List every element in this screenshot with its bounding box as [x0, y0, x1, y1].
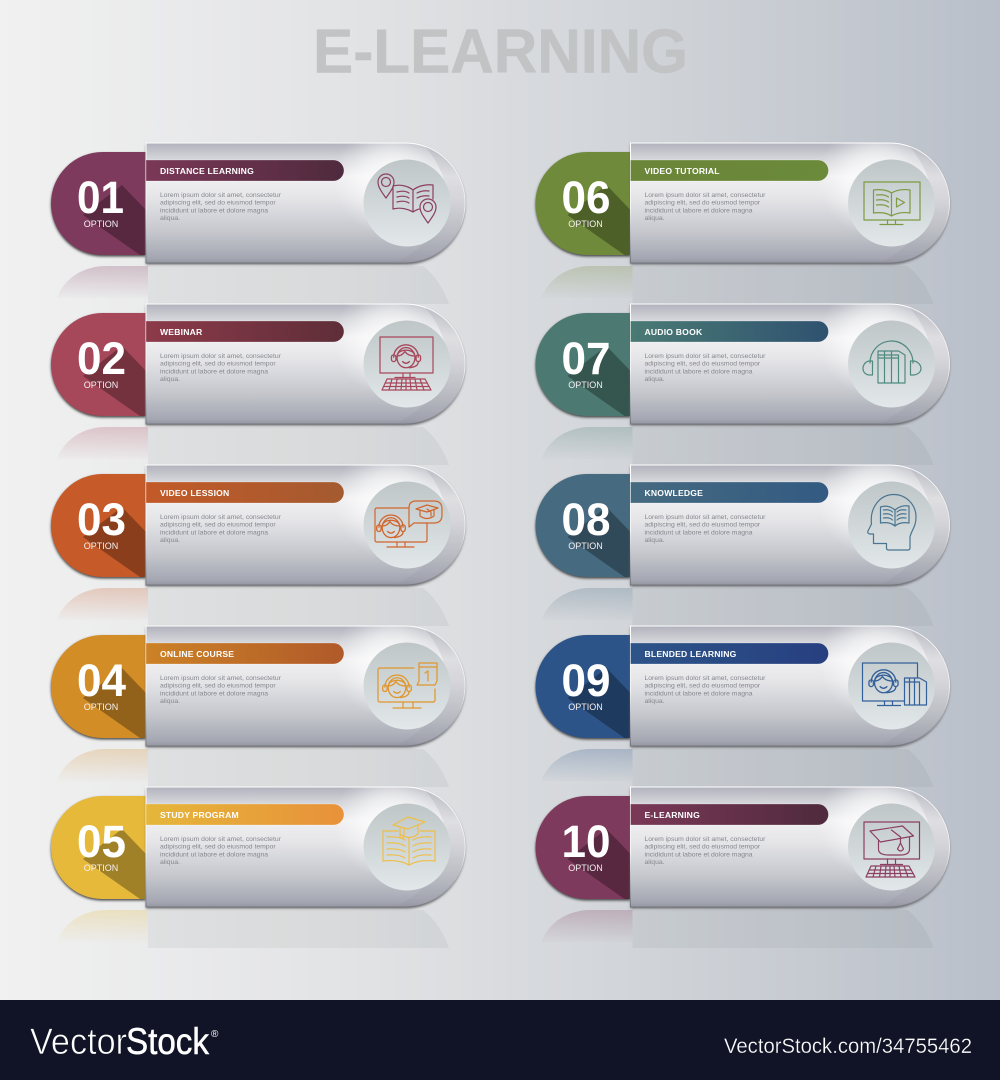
reflection	[57, 588, 449, 626]
icon: video book on monitor	[864, 182, 920, 224]
body text: Lorem ipsum dolor sit amet, consectetur	[160, 192, 282, 199]
heading: BLENDED LEARNING	[644, 649, 737, 659]
image id: VectorStock.com/34755462	[724, 1035, 972, 1058]
option label: OPTION	[84, 380, 118, 390]
icon disc	[364, 804, 450, 890]
panel: 04 online course	[51, 626, 465, 787]
body text	[644, 836, 766, 866]
body text: incididunt ut labore et dolore magna	[160, 851, 268, 858]
body text: adipiscing elit, sed do eiusmod tempor	[160, 361, 276, 368]
body text	[644, 675, 766, 705]
body text: incididunt ut labore et dolore magna	[160, 690, 268, 697]
footer bar	[0, 1000, 1000, 1080]
body text: Lorem ipsum dolor sit amet, consectetur	[644, 192, 766, 199]
option label: OPTION	[568, 702, 603, 712]
vectorstock logo: Stock	[126, 1021, 209, 1062]
body text	[160, 353, 282, 383]
body text: aliqua.	[644, 215, 665, 222]
body text: incididunt ut labore et dolore magna	[644, 690, 753, 697]
icon: open book with graduation cap	[383, 817, 435, 865]
icon disc	[848, 482, 935, 568]
silver card	[630, 304, 950, 426]
number: 06	[562, 172, 610, 223]
body text: aliqua.	[644, 376, 665, 383]
reflection	[57, 749, 449, 787]
number tab	[51, 313, 146, 418]
heading: DISTANCE LEARNING	[160, 166, 254, 176]
body text	[160, 192, 282, 222]
icon disc	[364, 642, 450, 730]
body text	[160, 675, 282, 705]
body text: Lorem ipsum dolor sit amet, consectetur	[160, 353, 282, 360]
title bar	[146, 160, 344, 181]
reflection	[542, 266, 934, 304]
body text: adipiscing elit, sed do eiusmod tempor	[160, 844, 276, 851]
body text: Lorem ipsum dolor sit amet, consectetur	[160, 836, 282, 843]
body text: adipiscing elit, sed do eiusmod tempor	[160, 522, 276, 529]
heading: KNOWLEDGE	[644, 488, 703, 498]
reflection	[542, 427, 934, 465]
body text: aliqua.	[644, 537, 665, 544]
number tab	[536, 635, 630, 740]
reflection	[57, 266, 449, 304]
number tab	[536, 313, 630, 418]
body text: aliqua.	[160, 537, 180, 544]
body text: incididunt ut labore et dolore magna	[160, 529, 268, 536]
panel: 03 video lession	[51, 465, 465, 626]
panel: 01 distance learning	[51, 143, 465, 304]
icon: online course monitor and calendar	[378, 663, 437, 708]
body text: adipiscing elit, sed do eiusmod tempor	[644, 844, 761, 851]
body text: adipiscing elit, sed do eiusmod tempor	[160, 200, 276, 207]
silver card	[146, 626, 465, 748]
body text: incididunt ut labore et dolore magna	[160, 207, 268, 214]
icon disc	[364, 320, 450, 408]
number tab	[51, 796, 146, 900]
option label: OPTION	[84, 219, 118, 229]
body text: incididunt ut labore et dolore magna	[644, 529, 753, 536]
body text: Lorem ipsum dolor sit amet, consectetur	[160, 514, 282, 521]
body text: incididunt ut labore et dolore magna	[644, 368, 753, 375]
option label: OPTION	[568, 541, 603, 551]
icon: head with open book	[868, 494, 916, 550]
heading: AUDIO BOOK	[644, 327, 703, 337]
number: 07	[562, 333, 610, 384]
panel: 08 knowledge	[536, 465, 950, 626]
reflection	[542, 588, 934, 626]
silver card	[630, 465, 950, 586]
heading: WEBINAR	[160, 327, 203, 337]
body text: adipiscing elit, sed do eiusmod tempor	[644, 522, 761, 529]
number tab	[536, 796, 630, 900]
body text: incididunt ut labore et dolore magna	[644, 851, 753, 858]
body text: incididunt ut labore et dolore magna	[644, 207, 753, 214]
icon disc	[364, 482, 450, 568]
body text: aliqua.	[644, 698, 665, 705]
vectorstock logo: Vector	[30, 1021, 127, 1062]
option label: OPTION	[84, 541, 118, 551]
body text: aliqua.	[160, 698, 180, 705]
number tab	[51, 474, 146, 578]
body text: Lorem ipsum dolor sit amet, consectetur	[644, 353, 766, 360]
vectorstock logo: ®	[211, 1029, 219, 1040]
panel: 07 audio book	[536, 304, 950, 465]
number tab	[536, 152, 630, 256]
heading: E-LEARNING	[644, 810, 700, 820]
option label: OPTION	[84, 702, 118, 712]
body text	[644, 192, 766, 222]
title bar	[630, 160, 828, 181]
option label: OPTION	[568, 380, 603, 390]
body text	[644, 514, 766, 544]
body text	[160, 514, 282, 544]
title bar	[146, 804, 344, 825]
number: 10	[562, 816, 610, 867]
body text	[644, 353, 766, 383]
icon disc	[848, 160, 935, 246]
title bar	[630, 643, 828, 664]
silver card	[146, 787, 465, 908]
panel: 10 e-learning	[536, 787, 950, 948]
icon disc	[364, 160, 450, 246]
number: 01	[77, 172, 124, 223]
vectorstock logo	[30, 1021, 219, 1062]
icon disc	[848, 804, 935, 890]
heading: ONLINE COURSE	[160, 649, 234, 659]
option label: OPTION	[568, 219, 603, 229]
silver card	[630, 143, 950, 264]
silver card	[630, 626, 950, 748]
number: 08	[562, 494, 610, 545]
silver card	[146, 143, 465, 264]
reflection	[57, 427, 449, 465]
heading: VIDEO LESSION	[160, 488, 229, 498]
icon disc	[848, 320, 935, 408]
panel: 05 study program	[51, 787, 465, 948]
icon: headphones and books	[863, 341, 921, 383]
body text: Lorem ipsum dolor sit amet, consectetur	[644, 514, 766, 521]
title bar	[146, 643, 344, 664]
body text: incididunt ut labore et dolore magna	[160, 368, 268, 375]
body text: aliqua.	[160, 215, 180, 222]
body text: Lorem ipsum dolor sit amet, consectetur	[644, 836, 766, 843]
body text: adipiscing elit, sed do eiusmod tempor	[160, 683, 276, 690]
body text: Lorem ipsum dolor sit amet, consectetur	[160, 675, 282, 682]
body text: aliqua.	[644, 859, 665, 866]
option label: OPTION	[84, 863, 118, 873]
icon: video lesson with speech bubble	[375, 501, 442, 547]
option label: OPTION	[568, 863, 603, 873]
silver card	[146, 304, 465, 426]
number: 04	[77, 655, 126, 706]
title bar	[146, 321, 344, 342]
icon disc	[848, 642, 935, 730]
number tab	[51, 152, 146, 256]
title bar	[146, 482, 344, 503]
body text: aliqua.	[160, 376, 180, 383]
body text: adipiscing elit, sed do eiusmod tempor	[644, 200, 761, 207]
silver card	[146, 465, 465, 586]
body text: adipiscing elit, sed do eiusmod tempor	[644, 683, 761, 690]
panel: 02 webinar	[51, 304, 465, 465]
reflection	[542, 910, 934, 948]
body text: Lorem ipsum dolor sit amet, consectetur	[644, 675, 766, 682]
silver card	[630, 787, 950, 908]
reflection	[57, 910, 449, 948]
body text: aliqua.	[160, 859, 180, 866]
icon: webinar monitor and keyboard	[380, 337, 433, 390]
number tab	[51, 635, 146, 740]
body text	[160, 836, 282, 866]
icon: book with map pins	[378, 174, 436, 223]
panel: 06 video tutorial	[536, 143, 950, 304]
number: 02	[77, 333, 126, 384]
number: 05	[77, 816, 126, 867]
icon: graduation cap on monitor	[864, 822, 920, 877]
reflection	[542, 749, 934, 787]
title: E-LEARNING	[313, 18, 688, 86]
heading: VIDEO TUTORIAL	[644, 166, 720, 176]
heading: STUDY PROGRAM	[160, 810, 239, 820]
panel: 09 blended learning	[536, 626, 950, 787]
number tab	[536, 474, 630, 578]
title bar	[630, 482, 828, 503]
title bar	[630, 804, 828, 825]
body text: adipiscing elit, sed do eiusmod tempor	[644, 361, 761, 368]
number: 03	[77, 494, 126, 545]
number: 09	[562, 655, 610, 706]
icon: monitor tutor with books	[862, 663, 926, 706]
title bar	[630, 321, 828, 342]
